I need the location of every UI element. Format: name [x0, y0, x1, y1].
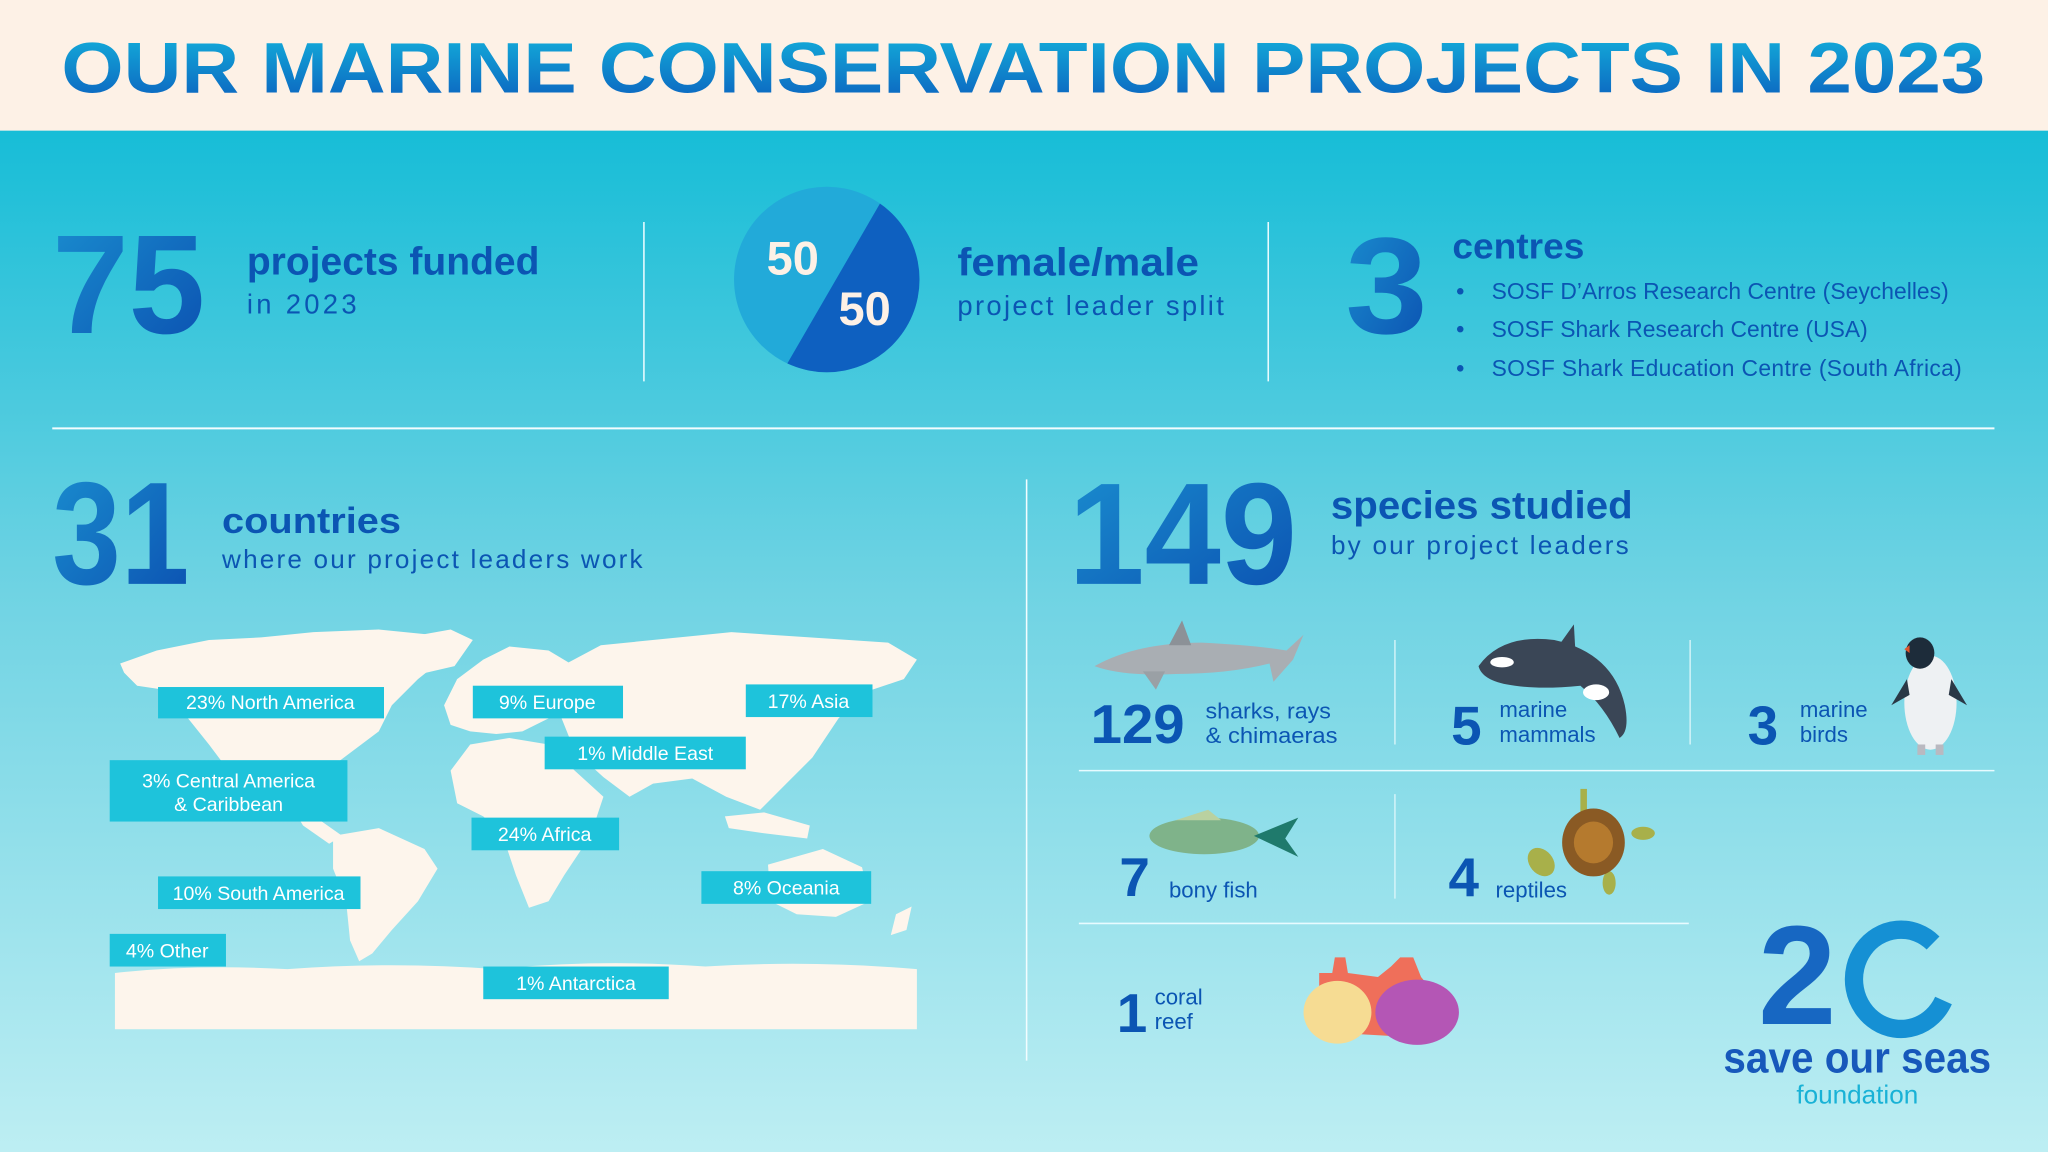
title: OUR MARINE CONSERVATION PROJECTS IN 2023: [61, 29, 1985, 109]
map labels: 3% Central America: [142, 771, 315, 793]
map labels: 17% Asia: [768, 691, 849, 713]
species: sharks: & chimaeras: [1206, 723, 1337, 748]
species: coral reef: 1: [1117, 982, 1147, 1044]
stat: projects funded: projects funded: [247, 240, 539, 283]
map labels: [110, 684, 872, 999]
map labels: 23% North America: [186, 692, 355, 714]
species: marine birds: marine: [1800, 697, 1868, 722]
species: sharks: [1091, 620, 1337, 755]
stat: gender split circle: 50: [767, 231, 819, 284]
stat: gender split circle: [734, 186, 920, 372]
stat: countries: countries: [222, 500, 401, 541]
stat: countries: where our project leaders work: [221, 544, 644, 574]
logo: save our seas foundation: foundation: [1796, 1080, 1918, 1110]
stat: countries: [52, 452, 644, 615]
map labels: 10% South America: [173, 883, 345, 905]
logo: save our seas foundation: [1723, 896, 1991, 1110]
stat: female/male text: [957, 242, 1224, 321]
species: marine mammals: marine: [1499, 697, 1567, 722]
map labels: 24% Africa: [498, 824, 592, 846]
stat: centres: SOSF D’Arros Research Centre (Seychelles): [1492, 278, 1949, 304]
species: bony fish: [1119, 810, 1298, 908]
map labels: 1% Middle East: [577, 743, 714, 765]
stat: species: species studied: [1331, 485, 1633, 528]
species: marine mammals: [1451, 624, 1627, 756]
stat: projects funded: 75: [52, 205, 205, 363]
map labels: 1% Antarctica: [516, 973, 636, 995]
species: coral reef: [1117, 957, 1459, 1045]
stat: centres: [1345, 210, 1962, 381]
stat: species: [1068, 453, 1633, 615]
species: sharks: 129: [1091, 693, 1185, 755]
stat: centres: SOSF Shark Research Centre (USA): [1492, 316, 1868, 342]
map labels: & Caribbean: [174, 794, 283, 816]
stat: projects funded: in 2023: [247, 288, 357, 319]
stat: projects funded: [52, 205, 539, 363]
species: bony fish: bony fish: [1169, 877, 1258, 902]
stat: species: 149: [1068, 453, 1297, 615]
species: marine birds: 3: [1748, 694, 1778, 756]
species: reptiles: [1448, 789, 1655, 908]
logo: save our seas foundation: save our seas: [1723, 1034, 1991, 1082]
map labels: 9% Europe: [499, 692, 596, 714]
species: marine mammals: mammals: [1499, 722, 1596, 747]
stat: centres: 3: [1345, 210, 1428, 363]
species: reptiles: 4: [1448, 846, 1479, 908]
species: marine mammals: 5: [1451, 694, 1482, 756]
stat: gender split circle: 50: [839, 282, 891, 335]
map labels: 4% Other: [126, 940, 209, 962]
species: marine birds: birds: [1800, 722, 1848, 747]
map labels: 8% Oceania: [733, 878, 840, 900]
logo: save our seas foundation: 2: [1758, 896, 1836, 1054]
stat: female/male text: project leader split: [957, 290, 1224, 321]
world map: [115, 630, 917, 1029]
stat: female/male text: female/male: [957, 242, 1199, 285]
species: marine birds: [1748, 637, 1967, 756]
species: coral reef: coral: [1155, 984, 1203, 1009]
stat: species: by our project leaders: [1331, 530, 1629, 560]
stat: centres: centres: [1452, 226, 1584, 267]
header band: [0, 0, 2048, 131]
species: sharks: sharks, rays: [1206, 698, 1331, 723]
species: reptiles: reptiles: [1496, 877, 1567, 902]
stat: countries: 31: [52, 452, 189, 615]
species: coral reef: reef: [1155, 1009, 1194, 1034]
species: bony fish: 7: [1119, 846, 1150, 908]
stat: centres: SOSF Shark Education Centre (South Africa): [1492, 355, 1962, 381]
